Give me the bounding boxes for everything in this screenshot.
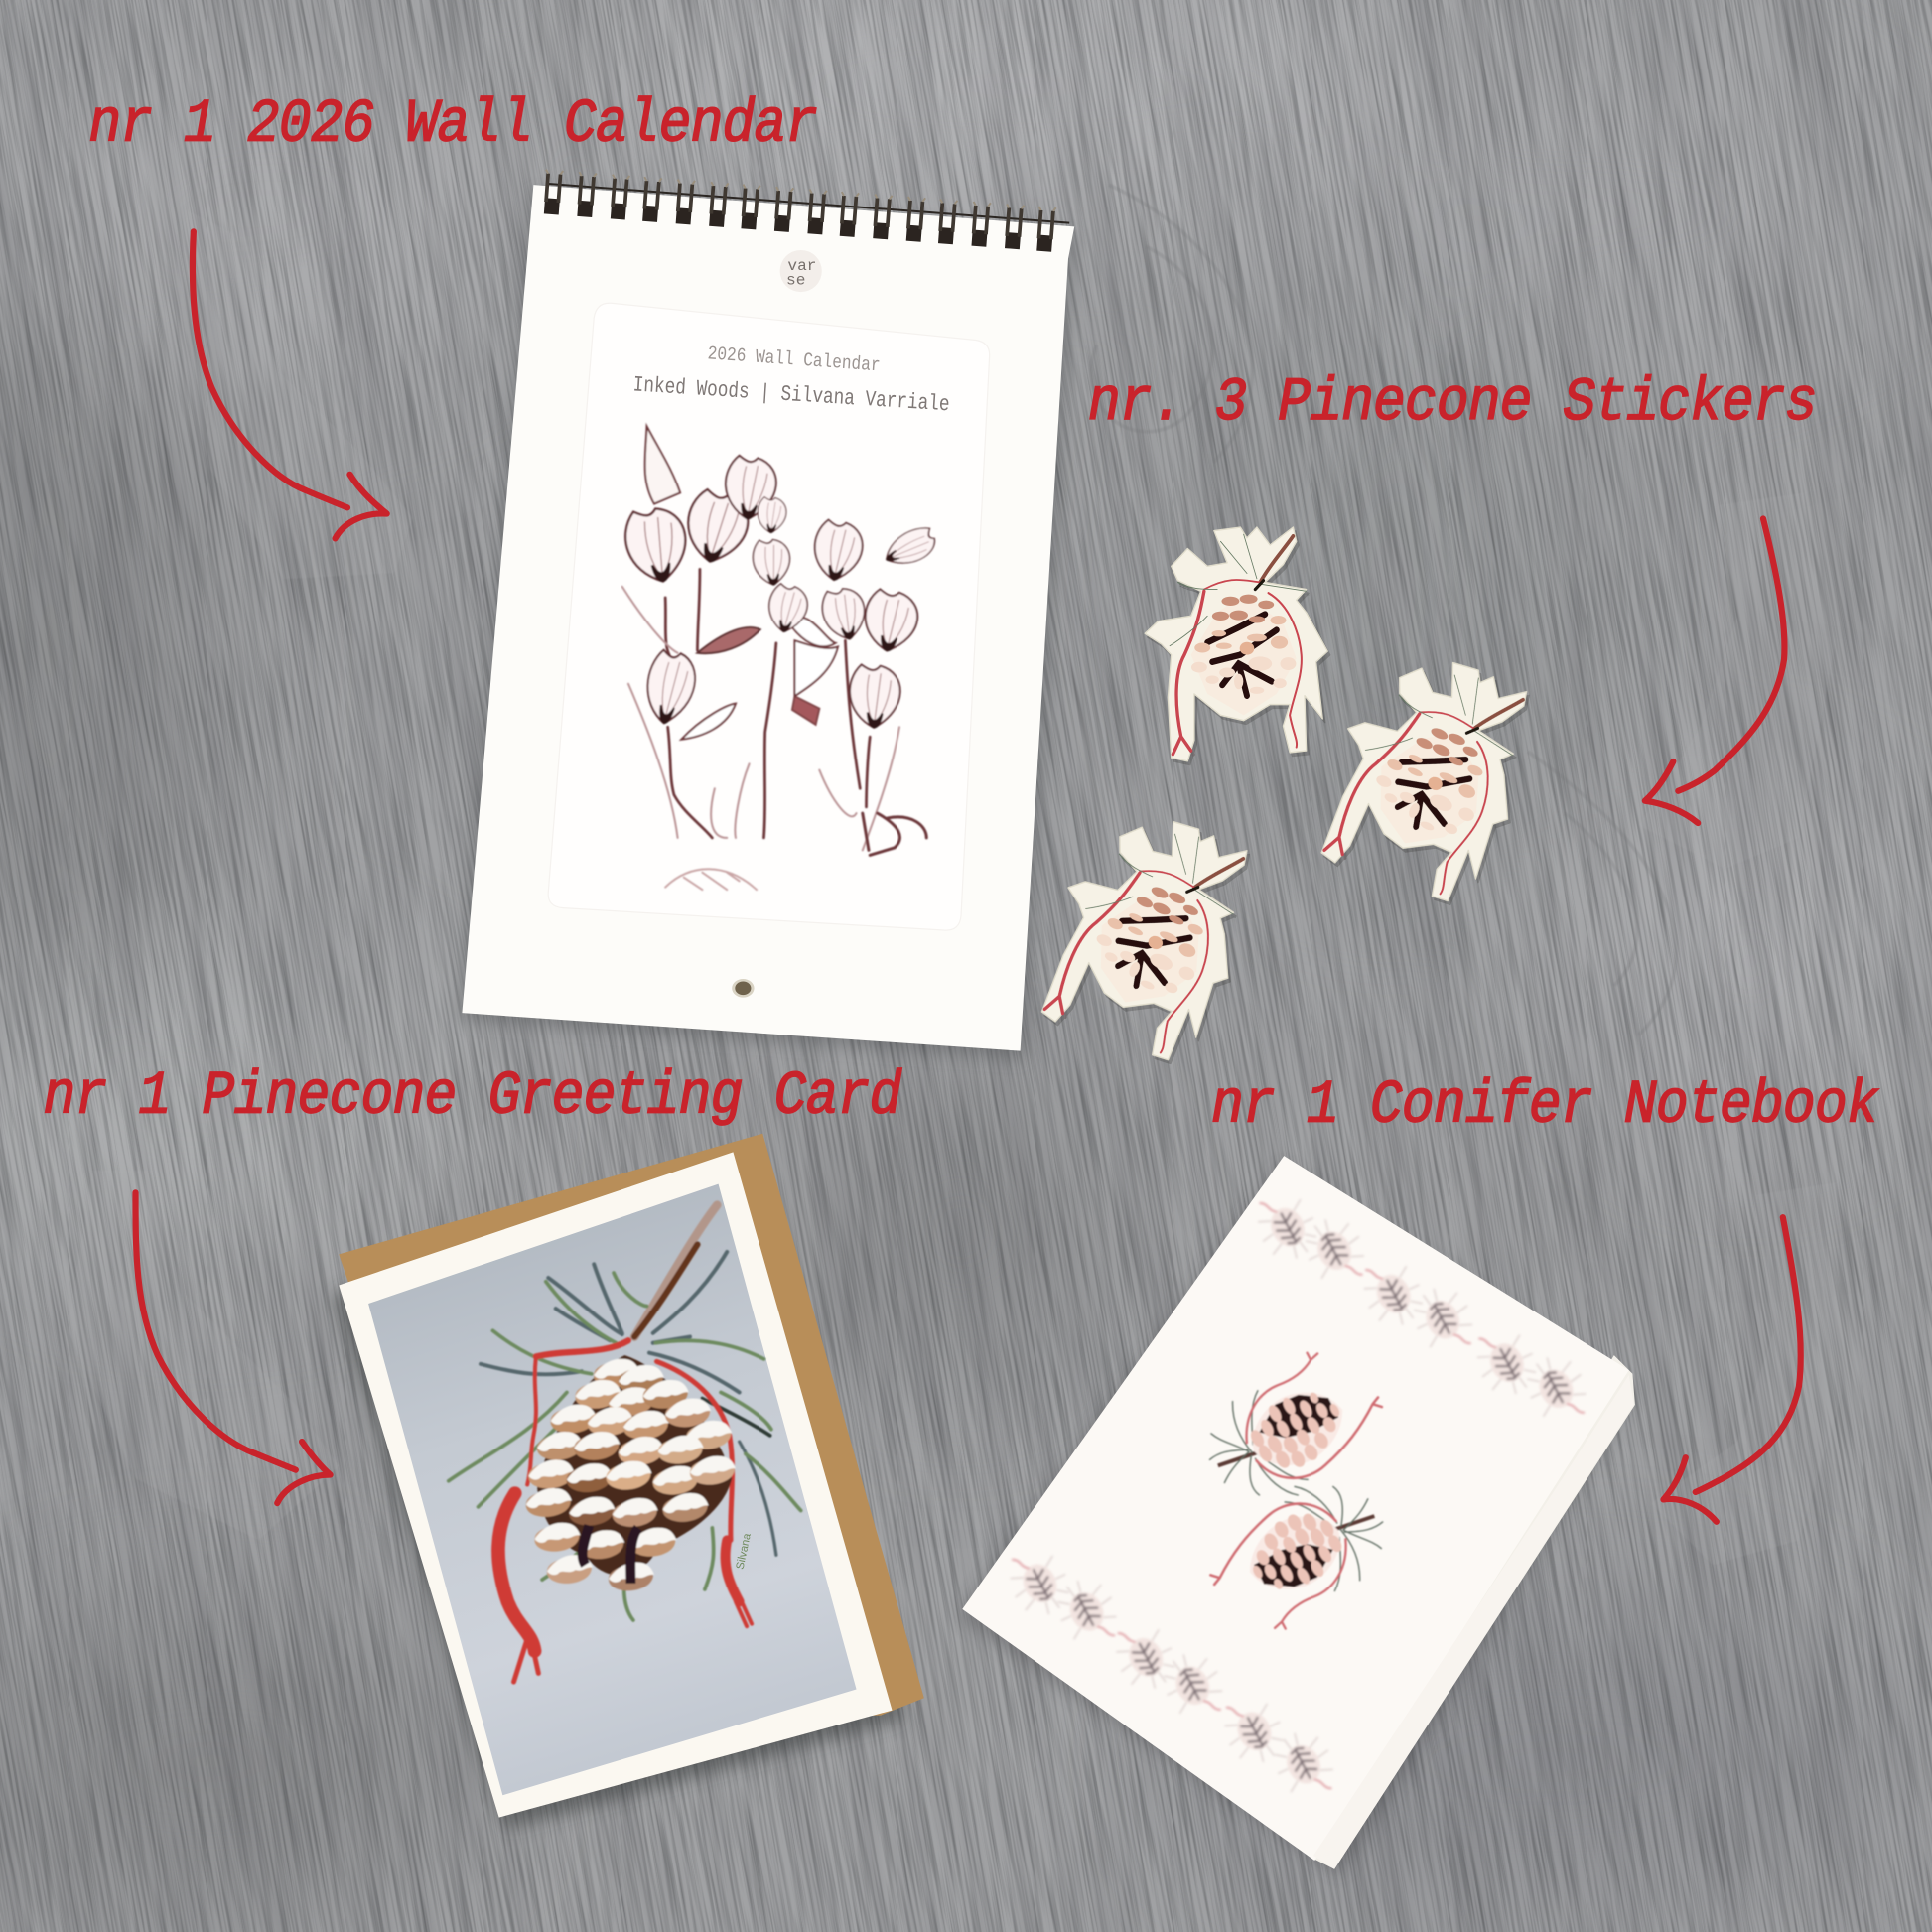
calendar page (462, 185, 1074, 1051)
logo badge (780, 250, 822, 292)
conifer notebook (959, 1156, 1636, 1875)
white card (339, 1152, 893, 1818)
heading: pinecone stickers: nr. 3 Pinecone Stickers (1088, 369, 1818, 438)
bottom pinecone border (1000, 1542, 1343, 1806)
arrow: to greeting card (136, 1192, 331, 1503)
top pinecone border (1248, 1185, 1596, 1431)
watercolour panel (368, 1184, 857, 1795)
heading: greeting card: nr 1 Pinecone Greeting Card (43, 1063, 902, 1132)
greeting card set (333, 1134, 924, 1830)
pinecone stickers (1017, 527, 1561, 1082)
kraft envelope (339, 1134, 924, 1725)
cover fold strip (1313, 1375, 1634, 1869)
hanging hole (732, 979, 755, 998)
sticker 3 (1017, 790, 1281, 1082)
back pages (1307, 1355, 1635, 1869)
large pinecone pair (1186, 1333, 1406, 1648)
red ribbons (498, 1340, 752, 1682)
spiral binding (543, 170, 1069, 252)
arrow: to stickers (1645, 518, 1784, 823)
calendar title: 2026 Wall Calendar (707, 344, 881, 377)
painting group (449, 1205, 801, 1682)
wall calendar (459, 170, 1074, 1059)
arrow: to calendar (193, 231, 387, 538)
sticker 1 (1145, 527, 1330, 765)
notebook cover (962, 1156, 1629, 1861)
heading: wall calendar: nr 1 2026 Wall Calendar (88, 91, 818, 159)
pine branch and needles (449, 1205, 801, 1620)
botanical sketch (622, 426, 940, 890)
arrow: to notebook (1663, 1217, 1801, 1522)
retouched patches around the arrows (68, 209, 1842, 1565)
logo badge: var (787, 257, 816, 275)
artist signature: Silvana (735, 1532, 754, 1571)
logo badge: se (786, 272, 805, 290)
heading: conifer notebook: nr 1 Conifer Notebook (1211, 1072, 1879, 1140)
artwork panel (548, 303, 990, 930)
sticker 2 (1296, 631, 1561, 923)
calendar subtitle: Inked Woods | Silvana Varriale (632, 373, 950, 418)
snowy pinecone (526, 1355, 736, 1590)
